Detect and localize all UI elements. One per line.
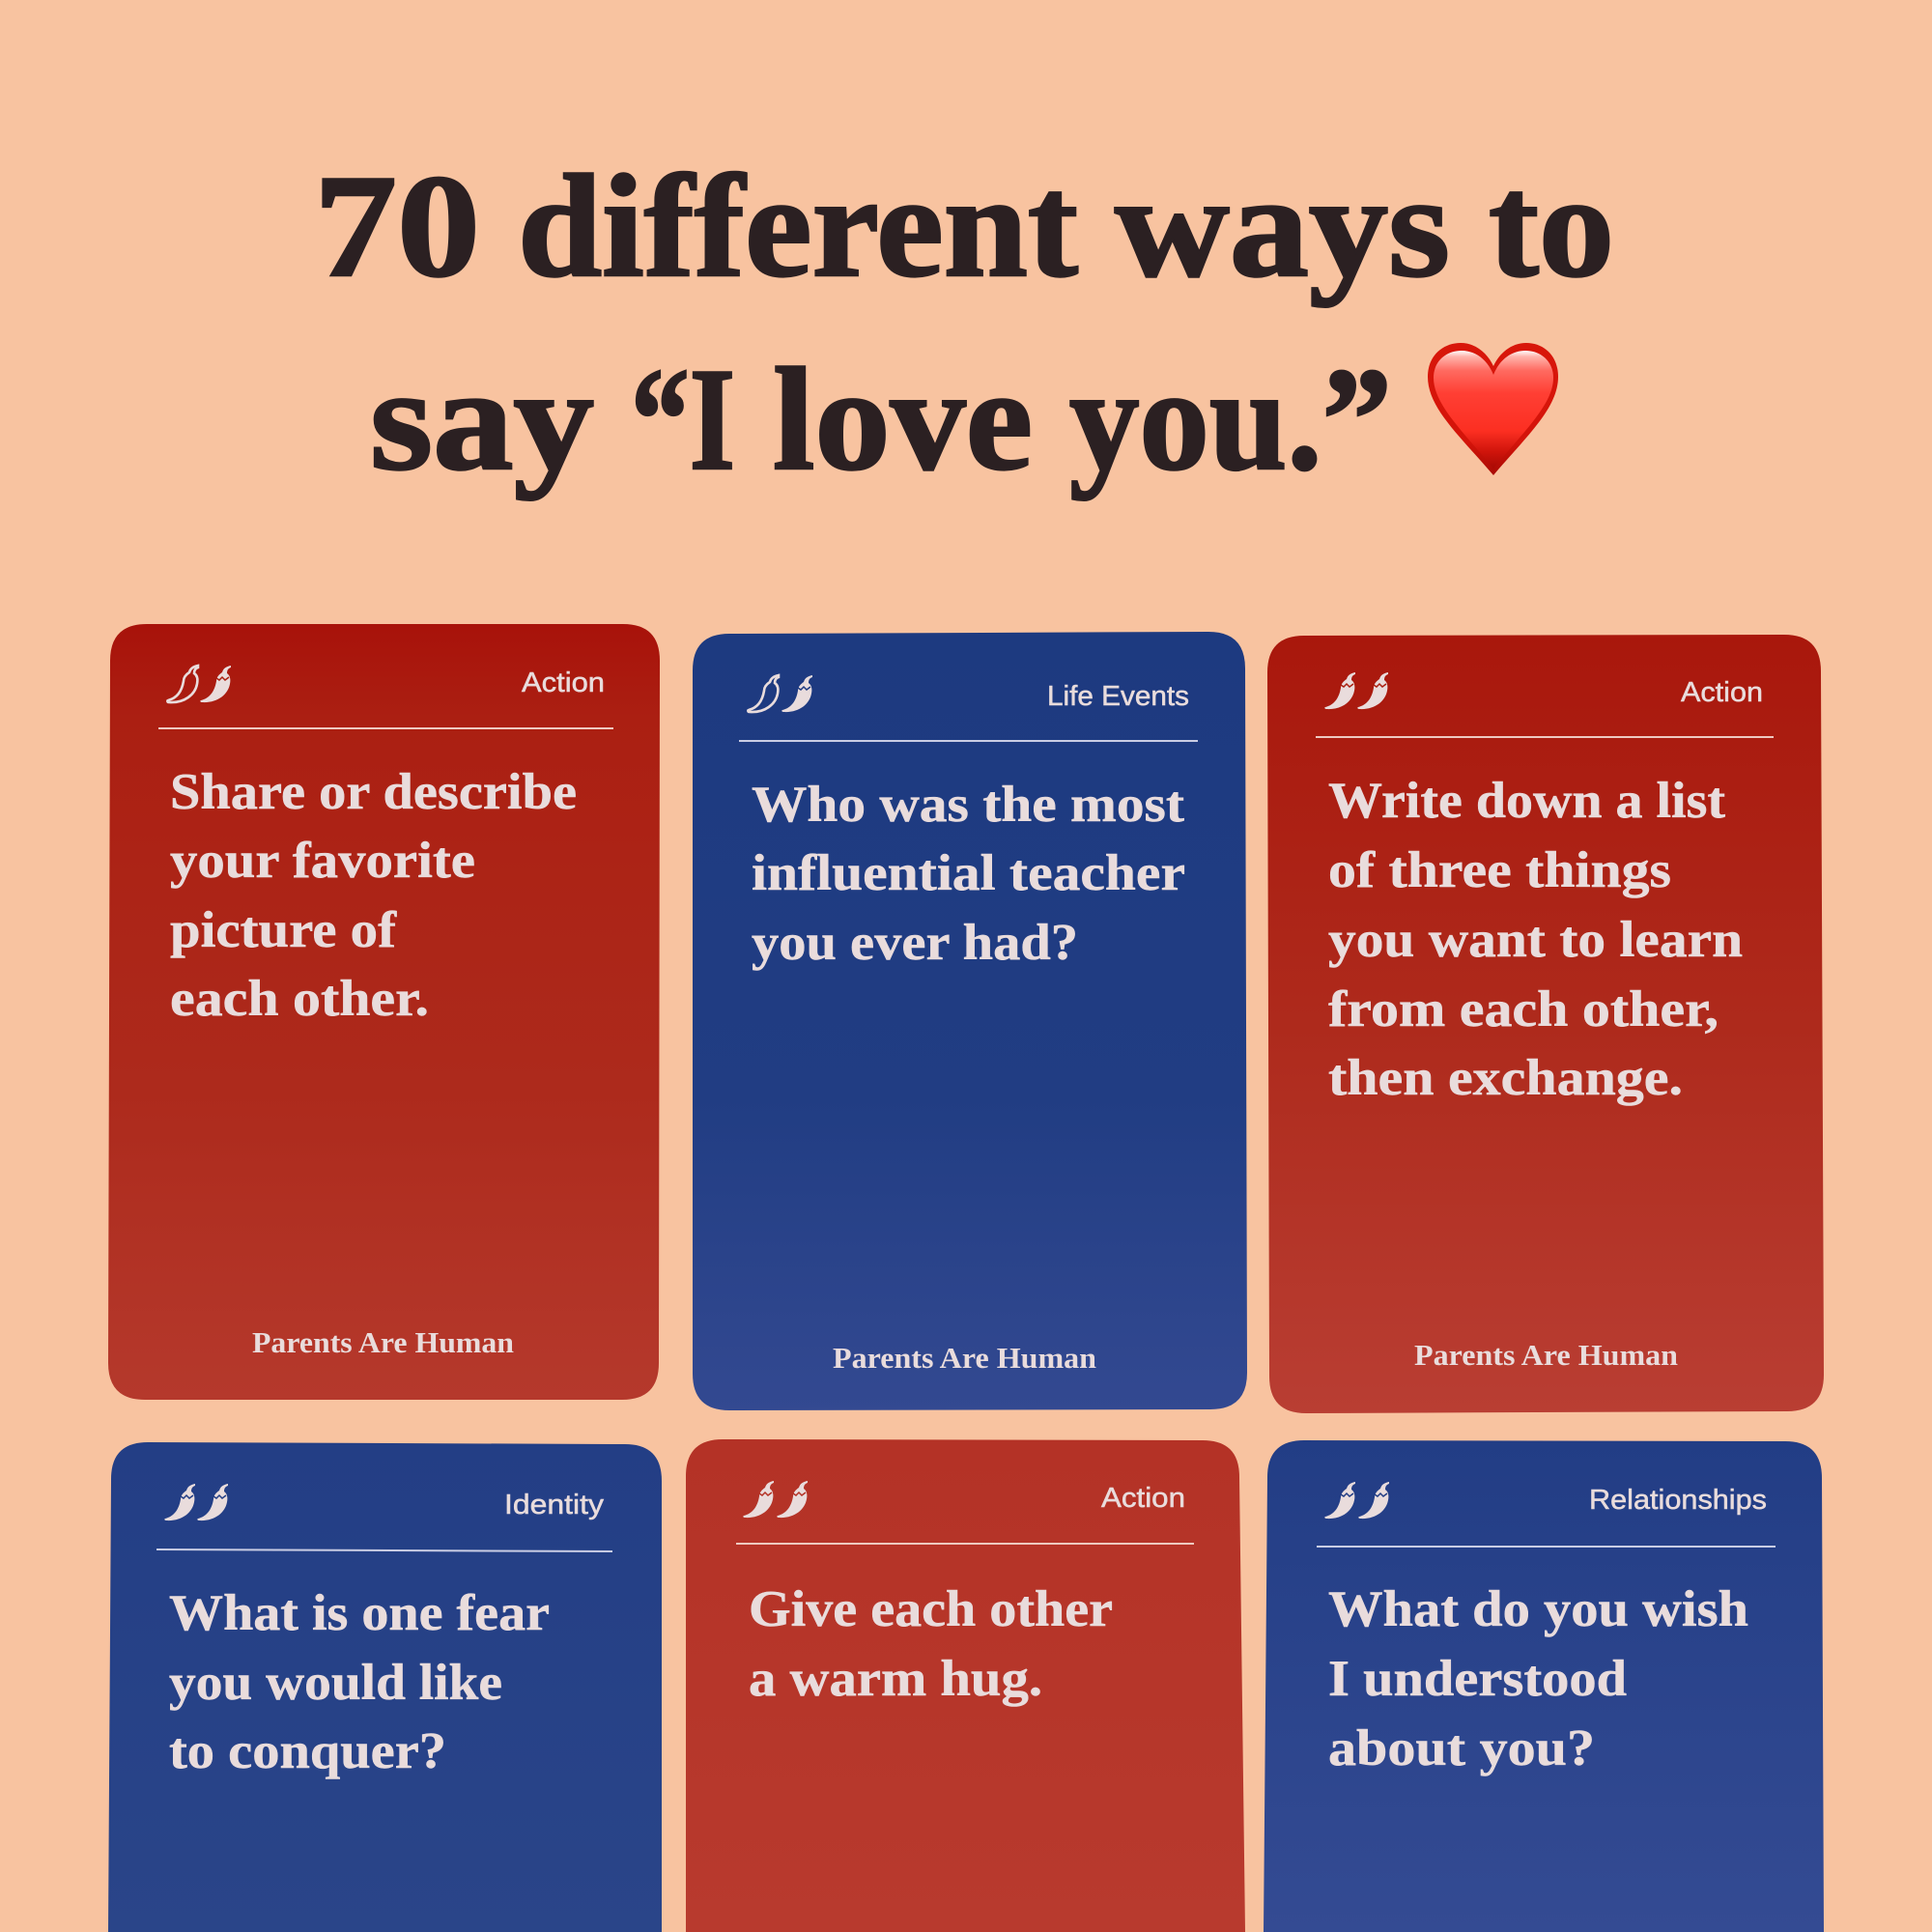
question text: each other. (170, 971, 429, 1027)
title: you.” (1069, 338, 1392, 500)
question text: a warm hug. (749, 1651, 1042, 1707)
title: to (1489, 145, 1614, 307)
question text: I understood (1328, 1651, 1627, 1707)
question text: about you? (1328, 1720, 1595, 1776)
icon: two chillies (1324, 672, 1388, 709)
footer: Parents Are Human (252, 1325, 514, 1359)
footer: Parents Are Human (833, 1341, 1096, 1375)
question text: Share or describe (170, 764, 577, 820)
category label: Life Events (1047, 681, 1189, 712)
question text: What is one fear (169, 1585, 550, 1641)
title: love (773, 338, 1033, 500)
category label: Action (522, 668, 605, 698)
question text: picture of (170, 902, 397, 958)
question text: Who was the most (752, 777, 1184, 833)
title: say (370, 338, 594, 500)
question text: your favorite (170, 833, 475, 889)
question text (169, 1585, 550, 1779)
question text (1328, 773, 1743, 1106)
question text (749, 1581, 1113, 1707)
card 6: Relationships (1264, 1440, 1824, 1932)
category label: Relationships (1589, 1485, 1767, 1516)
question text: Give each other (749, 1581, 1113, 1637)
question text (1328, 1581, 1748, 1776)
question text: you would like (169, 1655, 502, 1711)
card 1: Action (108, 624, 660, 1400)
question text: to conquer? (169, 1723, 446, 1779)
card 2: Life Events (693, 632, 1247, 1410)
icon: two chillies (164, 1484, 228, 1520)
category label: Action (1681, 677, 1763, 708)
category label: Action (1101, 1483, 1185, 1514)
question text: of three things (1328, 842, 1671, 898)
title (314, 145, 1614, 500)
title: different (518, 145, 1078, 307)
icon: two chillies (748, 675, 812, 712)
question text: you ever had? (752, 915, 1078, 971)
card 4: Identity (108, 1442, 662, 1932)
question text: then exchange. (1328, 1050, 1683, 1106)
question text (170, 764, 577, 1027)
question text: What do you wish (1328, 1581, 1748, 1637)
question text (752, 777, 1185, 971)
question text: Write down a list (1328, 773, 1725, 829)
question text: influential teacher (752, 845, 1185, 901)
footer: Parents Are Human (1414, 1338, 1678, 1372)
card 5: Action (686, 1439, 1245, 1932)
question text: you want to learn (1328, 912, 1743, 968)
card 3: Action (1267, 635, 1824, 1413)
category label: Identity (504, 1490, 605, 1520)
icon: red heart (1428, 343, 1558, 475)
question text: from each other, (1328, 981, 1719, 1037)
icon: two chillies (1324, 1482, 1389, 1519)
icon: two chillies (743, 1481, 808, 1518)
title: 70 (314, 145, 480, 307)
icon: two chillies (167, 666, 231, 702)
title: ways (1115, 145, 1450, 307)
title: “I (631, 338, 735, 500)
